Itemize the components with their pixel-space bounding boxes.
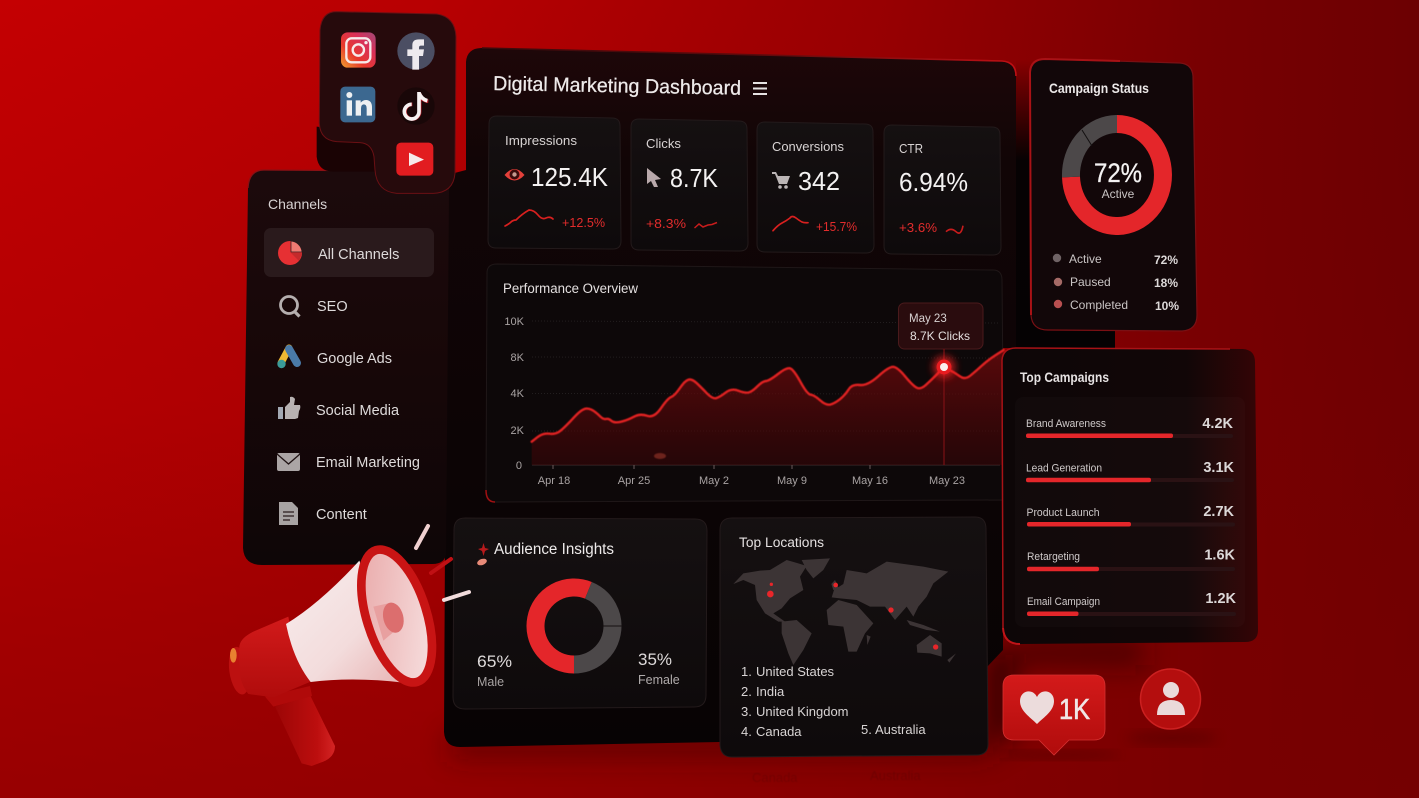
panel: audience insights: Audience Insights — [494, 541, 614, 558]
tooltip: May 23: May 23 — [909, 313, 947, 325]
panel: campaign status — [1030, 59, 1197, 331]
sound lines — [416, 526, 469, 600]
row: google ads: Google Ads — [317, 351, 392, 367]
KPI card: conversions: 342 — [798, 166, 840, 196]
campaign row: brand awareness: Brand Awareness — [1026, 418, 1106, 430]
sparkline — [773, 216, 808, 231]
axis labels: 10K — [504, 316, 525, 328]
panel: audience insights — [453, 518, 707, 709]
campaign row: lead generation: Lead Generation — [1026, 462, 1102, 474]
campaign row: lead generation — [1026, 460, 1235, 482]
axis labels: 2K — [511, 425, 525, 437]
icon: youtube — [396, 143, 433, 176]
data marker — [933, 356, 955, 378]
panel: social media icons — [317, 12, 456, 193]
floor shadows — [450, 640, 1145, 754]
axis labels — [504, 316, 1000, 487]
donut chart: gender split — [535, 588, 622, 664]
axis labels: May 23 — [929, 475, 965, 487]
KPI card: clicks — [631, 119, 748, 251]
KPI card: CTR — [884, 125, 1001, 255]
campaign row: retargeting — [1027, 548, 1236, 571]
status legend: 18% — [1154, 276, 1178, 290]
panel: campaign status: Active — [1102, 187, 1135, 201]
location list: 4. — [741, 724, 752, 739]
icon: heart — [1020, 691, 1054, 724]
icon: user silhouette — [1157, 682, 1185, 715]
KPI card: conversions: +15.7% — [816, 219, 857, 234]
location list — [741, 664, 926, 739]
icon: eye — [504, 169, 524, 180]
illustration: megaphone — [226, 541, 446, 766]
campaign row: email campaign: Email Campaign — [1027, 596, 1100, 608]
icon: audience marker — [476, 543, 489, 567]
status legend — [1053, 252, 1179, 313]
location list: Australia — [875, 722, 926, 737]
campaign row: retargeting: 1.6K — [1204, 548, 1236, 564]
panel: top campaigns: Top Campaigns — [1020, 370, 1109, 385]
campaign row: product launch: 2.7K — [1203, 504, 1235, 520]
location list: 1. — [741, 664, 752, 679]
axis labels: 0 — [516, 460, 522, 472]
location list: India — [756, 684, 785, 699]
panel: audience insights: Male — [477, 675, 504, 689]
icon: facebook — [397, 32, 435, 70]
badge: 1K likes — [1000, 675, 1120, 759]
panel: top locations: Top Locations — [739, 535, 824, 550]
row: all channels: All Channels — [318, 247, 399, 263]
campaign row: brand awareness — [1026, 416, 1234, 438]
world map — [733, 558, 956, 665]
floor reflection: Canada — [752, 770, 798, 785]
campaign row: product launch: Product Launch — [1026, 507, 1100, 519]
row: email marketing — [277, 453, 420, 471]
location list: 5. — [861, 722, 872, 737]
location list: Canada — [756, 724, 802, 739]
campaign row: email campaign — [1027, 591, 1237, 616]
row: google ads — [277, 348, 392, 368]
campaign row: brand awareness: 4.2K — [1202, 416, 1234, 432]
campaign row: product launch — [1026, 504, 1235, 526]
sparkline — [946, 226, 963, 233]
row: SEO: SEO — [317, 299, 348, 315]
icon: linkedin — [340, 87, 375, 122]
sparkline — [694, 222, 717, 228]
KPI card: clicks: 8.7K — [670, 163, 719, 193]
status legend: 10% — [1155, 299, 1179, 313]
icon: menu — [753, 83, 767, 94]
floor reflection: Australia — [870, 768, 921, 783]
location list: 2. — [741, 684, 752, 699]
panel: campaign status: 72% — [1094, 158, 1142, 188]
panel: main dashboard — [444, 48, 1016, 757]
panel: audience insights: 65% — [477, 652, 512, 671]
panel: campaign status: Campaign Status — [1049, 81, 1149, 96]
axis labels: May 16 — [852, 475, 888, 487]
sparkline — [505, 210, 553, 226]
KPI card: CTR: CTR — [899, 141, 923, 156]
status legend: Paused — [1070, 275, 1111, 289]
panel: top locations — [720, 517, 988, 757]
axis labels: May 9 — [777, 475, 807, 487]
axis labels: 8K — [511, 352, 525, 364]
status legend: 72% — [1154, 253, 1178, 267]
axis labels: Apr 18 — [538, 475, 570, 487]
row: email marketing: Email Marketing — [316, 455, 420, 471]
KPI card: impressions — [488, 116, 621, 249]
row: social media — [278, 397, 400, 419]
KPI card: impressions: +12.5% — [562, 215, 605, 230]
KPI card: impressions: Impressions — [505, 133, 578, 148]
axis labels: 4K — [511, 388, 525, 400]
KPI card: conversions: Conversions — [772, 139, 844, 154]
icon: instagram — [341, 32, 376, 68]
KPI card: CTR: +3.6% — [899, 220, 937, 235]
row: social media: Social Media — [316, 403, 400, 419]
campaign row: retargeting: Retargeting — [1027, 551, 1080, 563]
panel: top campaigns — [1002, 348, 1258, 644]
KPI card: clicks: Clicks — [646, 136, 681, 151]
status legend: Completed — [1070, 298, 1128, 312]
panel: performance overview chart — [486, 264, 1004, 502]
row: content: Content — [316, 507, 367, 523]
icon: cart — [772, 172, 790, 189]
icon: cursor — [647, 168, 661, 187]
heading: dashboard title: Digital Marketing Dashboard — [493, 73, 741, 100]
badge: 1K likes: 1K — [1059, 694, 1091, 726]
panel: channels: Channels — [268, 196, 327, 212]
KPI card: conversions — [757, 122, 874, 253]
icon: tiktok — [397, 87, 435, 125]
panel: audience insights: 35% — [638, 650, 672, 669]
KPI card: CTR: 6.94% — [899, 167, 968, 197]
status legend: Active — [1069, 252, 1102, 266]
tooltip: May 23 — [898, 303, 983, 465]
icon: pie — [278, 241, 302, 265]
donut chart: campaign status — [1071, 124, 1163, 226]
row: SEO — [280, 296, 348, 316]
campaign row: lead generation: 3.1K — [1203, 460, 1235, 476]
KPI card: clicks: +8.3% — [646, 216, 686, 231]
panel: channels — [243, 170, 449, 565]
row: all channels — [264, 228, 434, 277]
axis labels: Apr 25 — [618, 475, 650, 487]
tooltip: May 23: 8.7K Clicks — [910, 329, 970, 343]
location list: 3. — [741, 704, 752, 719]
panel: audience insights: Female — [638, 673, 680, 687]
campaign row: email campaign: 1.2K — [1205, 591, 1237, 607]
axis labels: May 2 — [699, 475, 729, 487]
area chart: clicks over time — [532, 350, 1004, 465]
location list: United Kingdom — [756, 704, 848, 719]
row: content — [279, 502, 367, 525]
badge: user — [1127, 669, 1217, 744]
KPI card: impressions: 125.4K — [531, 162, 609, 192]
shadow block behind right panels — [1016, 60, 1115, 348]
floor reflection — [752, 768, 921, 785]
panel: performance overview chart: Performance Overview — [503, 281, 638, 296]
location list: United States — [756, 664, 835, 679]
